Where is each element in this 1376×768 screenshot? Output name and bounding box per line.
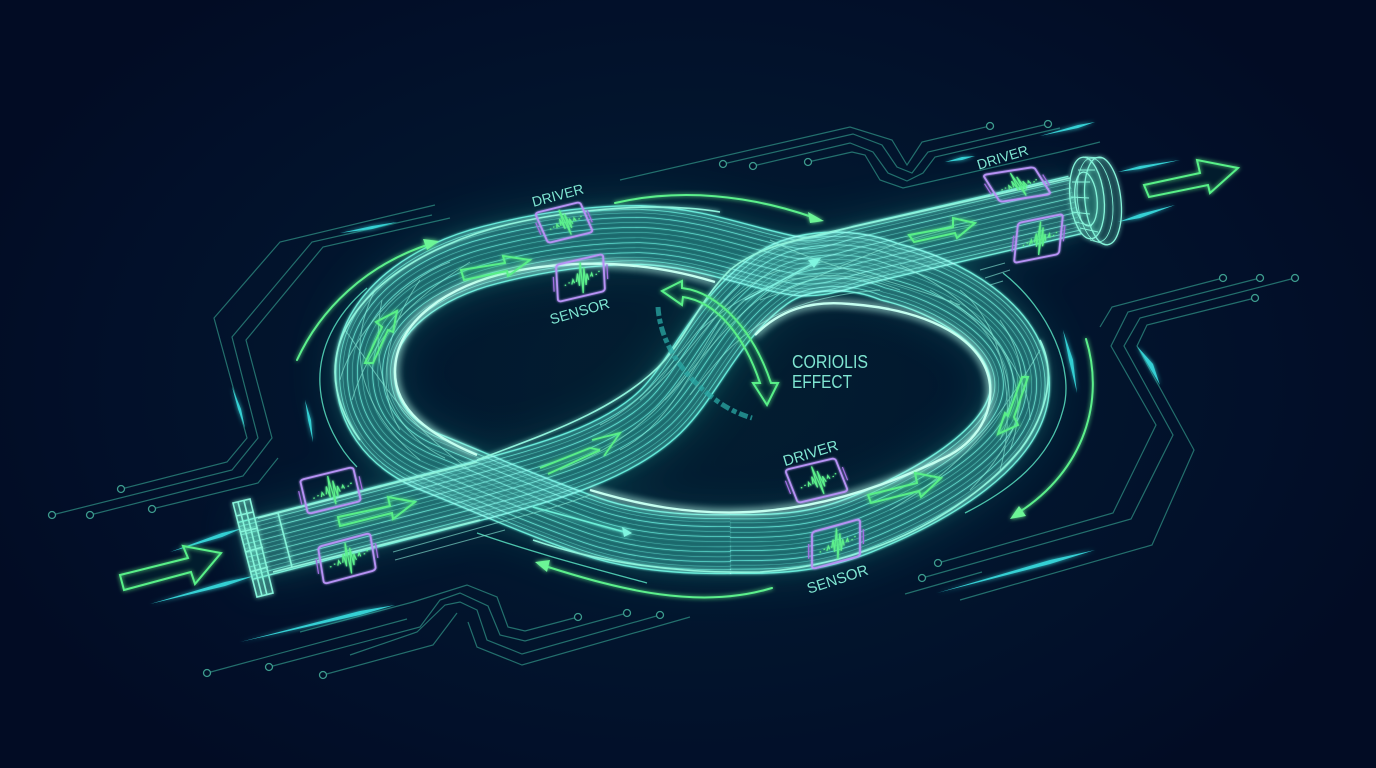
- bright outer edges: [258, 178, 1070, 572]
- sensor H: bottom sensor: [809, 518, 863, 570]
- label: coriolis effect: CORIOLIS: [792, 352, 868, 372]
- label: sensor top: SENSOR: [548, 296, 612, 328]
- curved arrow: right: [1010, 339, 1093, 519]
- arrow: diagonal tube: [540, 433, 620, 474]
- circuit traces: right: [905, 274, 1298, 600]
- circuit traces: bottom: [204, 585, 690, 678]
- tube halo glow: [245, 205, 1075, 551]
- coriolis tube: loop and inlet: [236, 230, 1052, 581]
- tube soft body glow: [245, 205, 1075, 551]
- arrow: outlet tube: [909, 218, 975, 242]
- coriolis double-headed arrow: [662, 281, 778, 405]
- inlet flange: [233, 499, 292, 597]
- curved arrow: top: [615, 195, 824, 223]
- label: driver bottom: DRIVER: [781, 437, 840, 470]
- label: driver outlet: DRIVER: [975, 142, 1030, 173]
- sensor F: outlet sensor: [1011, 213, 1066, 264]
- arrow: inlet: [120, 546, 221, 590]
- arrow: left lobe: [365, 311, 397, 363]
- sensor B: inlet lower: [314, 532, 380, 585]
- arrow: cyan flow lines: [533, 258, 821, 537]
- label: coriolis effect: EFFECT: [792, 372, 852, 392]
- circuit traces: top: [620, 120, 1100, 188]
- circuit traces: upper left: [48, 205, 450, 518]
- sensor E: outlet driver: [979, 166, 1055, 203]
- arrow: bottom tube: [868, 473, 941, 503]
- curved arrow: bottom: [535, 560, 772, 597]
- label: sensor bottom: SENSOR: [805, 562, 871, 598]
- arrow: top tube: [461, 256, 530, 280]
- arrow: inlet tube: [338, 497, 415, 526]
- loose fibre strands: [340, 225, 1040, 560]
- curved arrow: left: [297, 239, 439, 360]
- coriolis tube: return and outlet: [334, 174, 1083, 576]
- dashed coriolis arc: [658, 307, 752, 418]
- thin orbit arcs: [320, 273, 1066, 583]
- sensor C: top driver: [532, 201, 596, 244]
- bright inner edge: left lobe: [395, 264, 715, 455]
- arrow: outlet: [1144, 160, 1238, 197]
- cyan light streaks: [150, 122, 1180, 642]
- bright inner edge: right lobe: [590, 303, 990, 513]
- outlet ring flange: [1066, 155, 1126, 247]
- sensor A: inlet upper: [296, 466, 365, 515]
- arrow: right lobe: [998, 377, 1028, 434]
- label: driver top: DRIVER: [530, 181, 585, 210]
- sensor D: top sensor: [553, 253, 608, 303]
- sensor G: bottom driver: [782, 457, 852, 504]
